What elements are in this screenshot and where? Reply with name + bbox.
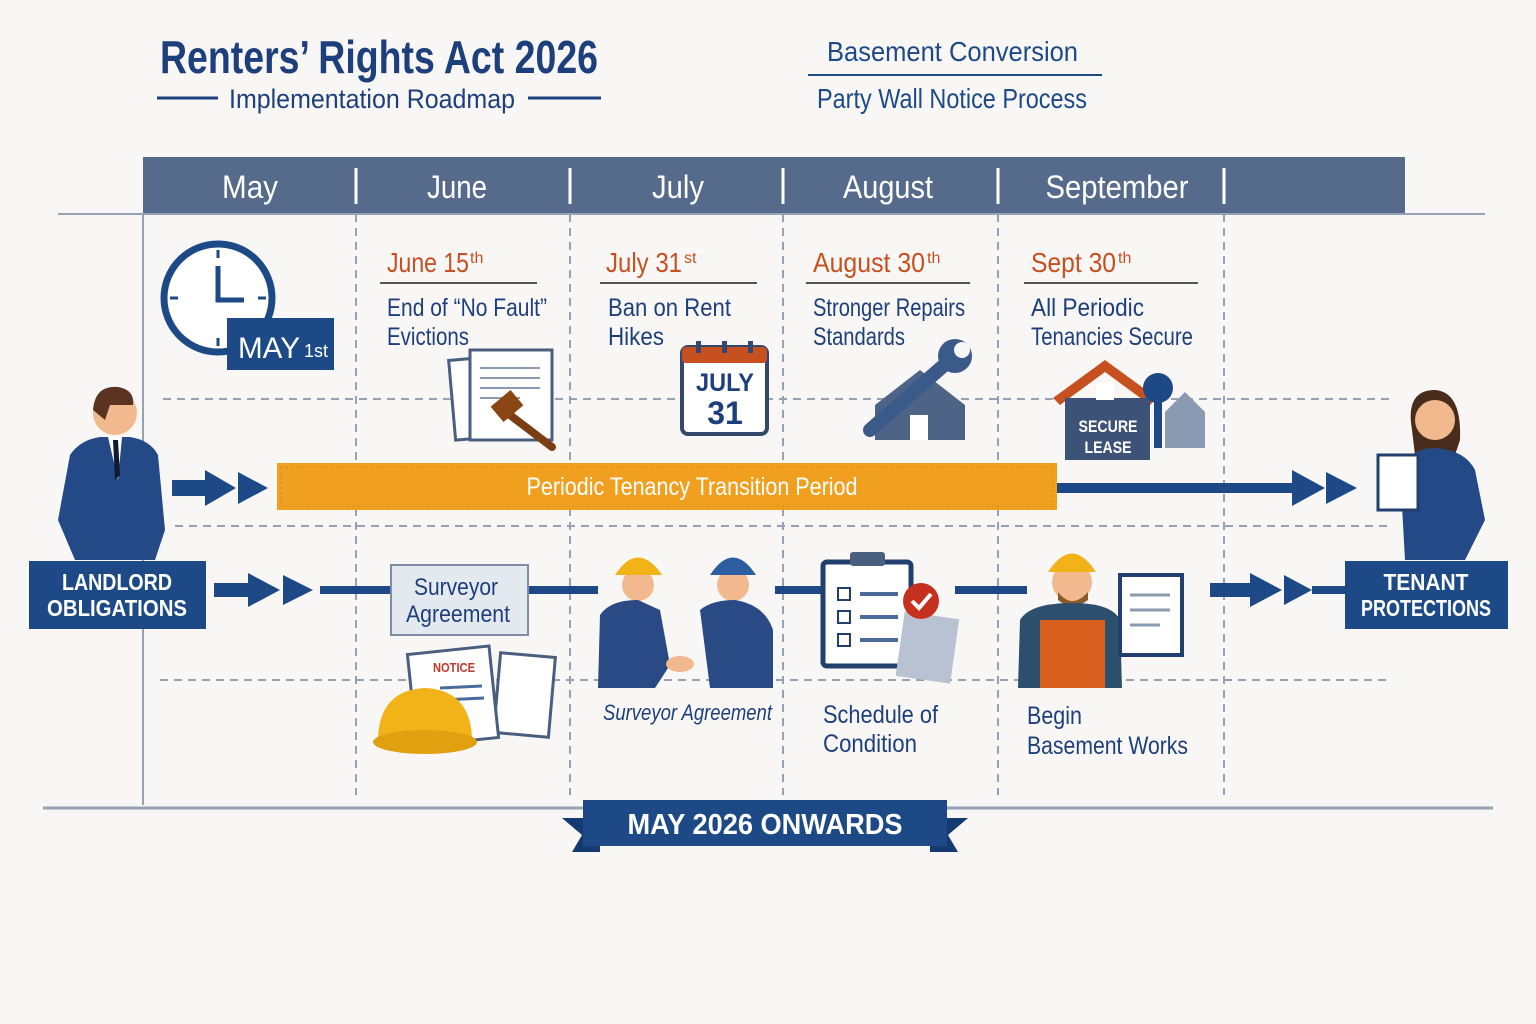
subtitle: basement conversion: Basement Conversion [827,36,1078,67]
title [157,31,601,114]
milestone: August 30th: Stronger Repairs [813,294,965,322]
icon: notice documents with hard hat: NOTICE [433,660,475,675]
icon: notice documents with hard hat [373,646,555,754]
ribbon: may 2026 onwards [562,800,968,852]
caption: schedule of condition: Schedule of [823,701,938,729]
icon: clock with May 1st tag [164,244,334,370]
milestone: Sept 30th: Sept 30 [1031,247,1116,278]
icon: secure lease house with key: LEASE [1084,438,1132,457]
subtitle: basement conversion [808,36,1102,114]
caption: schedule of condition [823,701,938,758]
icon: clock with May 1st tag: 1st [304,341,328,361]
milestone: August 30th [806,247,970,351]
milestone: July 31st [600,247,757,351]
month header bar: May [222,169,278,205]
arrows: landlord to transition bar [172,470,268,506]
caption: begin basement works [1027,702,1188,760]
caption: schedule of condition: Condition [823,730,917,758]
milestone: Sept 30th: All Periodic [1031,294,1144,322]
box: surveyor agreement: Agreement [406,601,510,628]
milestone: July 31st: Ban on Rent [608,294,731,322]
milestone: June 15th: th [470,250,483,267]
milestone: June 15th: End of “No Fault” [387,294,547,322]
transition bar [277,463,1057,510]
milestone: July 31st: July 31 [606,247,682,278]
title: Renters’ Rights Act 2026 [160,31,598,83]
icon: secure lease house with key [1053,360,1205,460]
figure: landlord [58,387,165,560]
month header bar [143,157,1405,213]
icon: clock with May 1st tag: MAY [238,332,300,365]
subtitle: basement conversion: Party Wall Notice Process [817,83,1087,114]
icon: calendar July 31: JULY [696,369,754,397]
month header bar: August [843,169,933,205]
title: Implementation Roadmap [229,84,515,114]
transition bar: Periodic Tenancy Transition Period [526,473,858,501]
month header bar: June [427,169,487,205]
icon: secure lease house with key: SECURE [1078,417,1138,436]
label: landlord obligations: LANDLORD [62,569,172,595]
milestone: Sept 30th [1024,247,1198,351]
milestone: August 30th: Standards [813,323,905,351]
icon: calendar July 31 [682,341,767,434]
arrows: lower process flow [214,573,1347,607]
box: surveyor agreement: Surveyor [414,574,498,601]
label: landlord obligations [29,561,206,629]
icon: schedule of condition clipboard [823,552,959,684]
icon: surveyors handshake [598,558,773,688]
caption: surveyor agreement: Surveyor Agreement [603,700,773,725]
milestone: July 31st: st [684,250,697,267]
milestone: Sept 30th: Tenancies Secure [1031,323,1193,351]
month header bar: July [652,169,704,205]
milestone: August 30th: th [927,250,940,267]
milestone: June 15th: Evictions [387,323,469,351]
milestone: June 15th [380,247,547,351]
ribbon: may 2026 onwards: MAY 2026 ONWARDS [628,809,902,841]
box: surveyor agreement [391,565,528,635]
milestone: Sept 30th: th [1118,250,1131,267]
milestone: June 15th: June 15 [387,247,469,278]
month header bar: September [1046,169,1189,205]
label: tenant protections [1345,561,1508,629]
label: landlord obligations: OBLIGATIONS [47,595,187,621]
icon: documents with gavel [449,350,552,447]
icon: calendar July 31: 31 [707,395,743,431]
caption: begin basement works: Begin [1027,702,1082,730]
label: tenant protections: TENANT [1384,569,1468,595]
icon: builder with clipboard [1018,554,1182,688]
milestone: August 30th: August 30 [813,247,925,278]
caption: begin basement works: Basement Works [1027,732,1188,760]
grid lines [43,214,1493,808]
figure: tenant [1378,390,1485,560]
milestone: July 31st: Hikes [608,323,664,351]
label: tenant protections: PROTECTIONS [1361,595,1491,621]
arrow: transition to tenant [1057,470,1357,506]
icon: house with wrench [870,339,972,440]
